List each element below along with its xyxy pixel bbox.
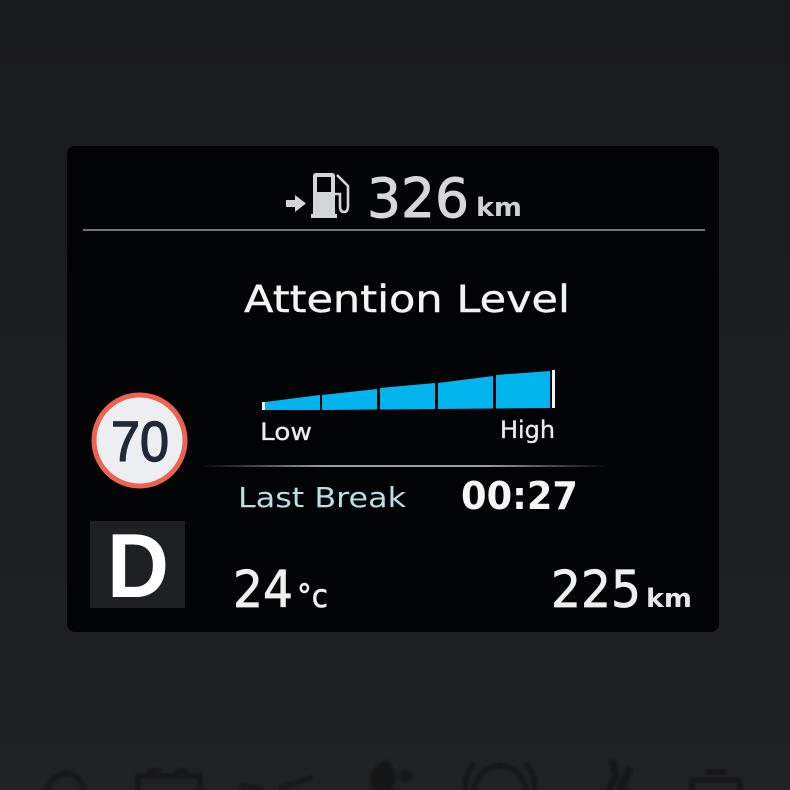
top divider <box>83 229 705 231</box>
faded warning icons along bottom edge <box>48 760 740 790</box>
heading: Attention Level: Attention Level <box>244 278 570 321</box>
range unit: km <box>476 193 522 223</box>
attention level gauge <box>262 370 555 410</box>
icon: arrow to fuel pump <box>286 195 306 212</box>
temperature readout: °c <box>297 577 328 615</box>
value: break time: 00:27 <box>461 474 578 518</box>
display panel <box>67 146 719 632</box>
gear indicator <box>90 516 185 617</box>
gauge label: High: High <box>500 416 555 444</box>
middle divider <box>200 465 610 467</box>
low marker <box>262 402 265 410</box>
trip distance readout: km <box>646 584 692 614</box>
gauge label: Low: Low <box>260 418 312 446</box>
trip distance readout: 225 <box>551 561 641 620</box>
speed limit sign: 70 <box>111 410 169 474</box>
high marker <box>552 370 555 408</box>
speed limit sign <box>94 395 185 486</box>
temperature readout: 24 <box>233 561 293 620</box>
icon: fuel pump <box>311 173 348 218</box>
label: Last Break: Last Break <box>238 481 407 514</box>
fuel range readout <box>286 167 522 230</box>
gear indicator: D <box>107 516 169 617</box>
trip distance readout <box>551 561 692 620</box>
range value: 326 <box>367 167 469 230</box>
temperature readout <box>233 561 328 620</box>
